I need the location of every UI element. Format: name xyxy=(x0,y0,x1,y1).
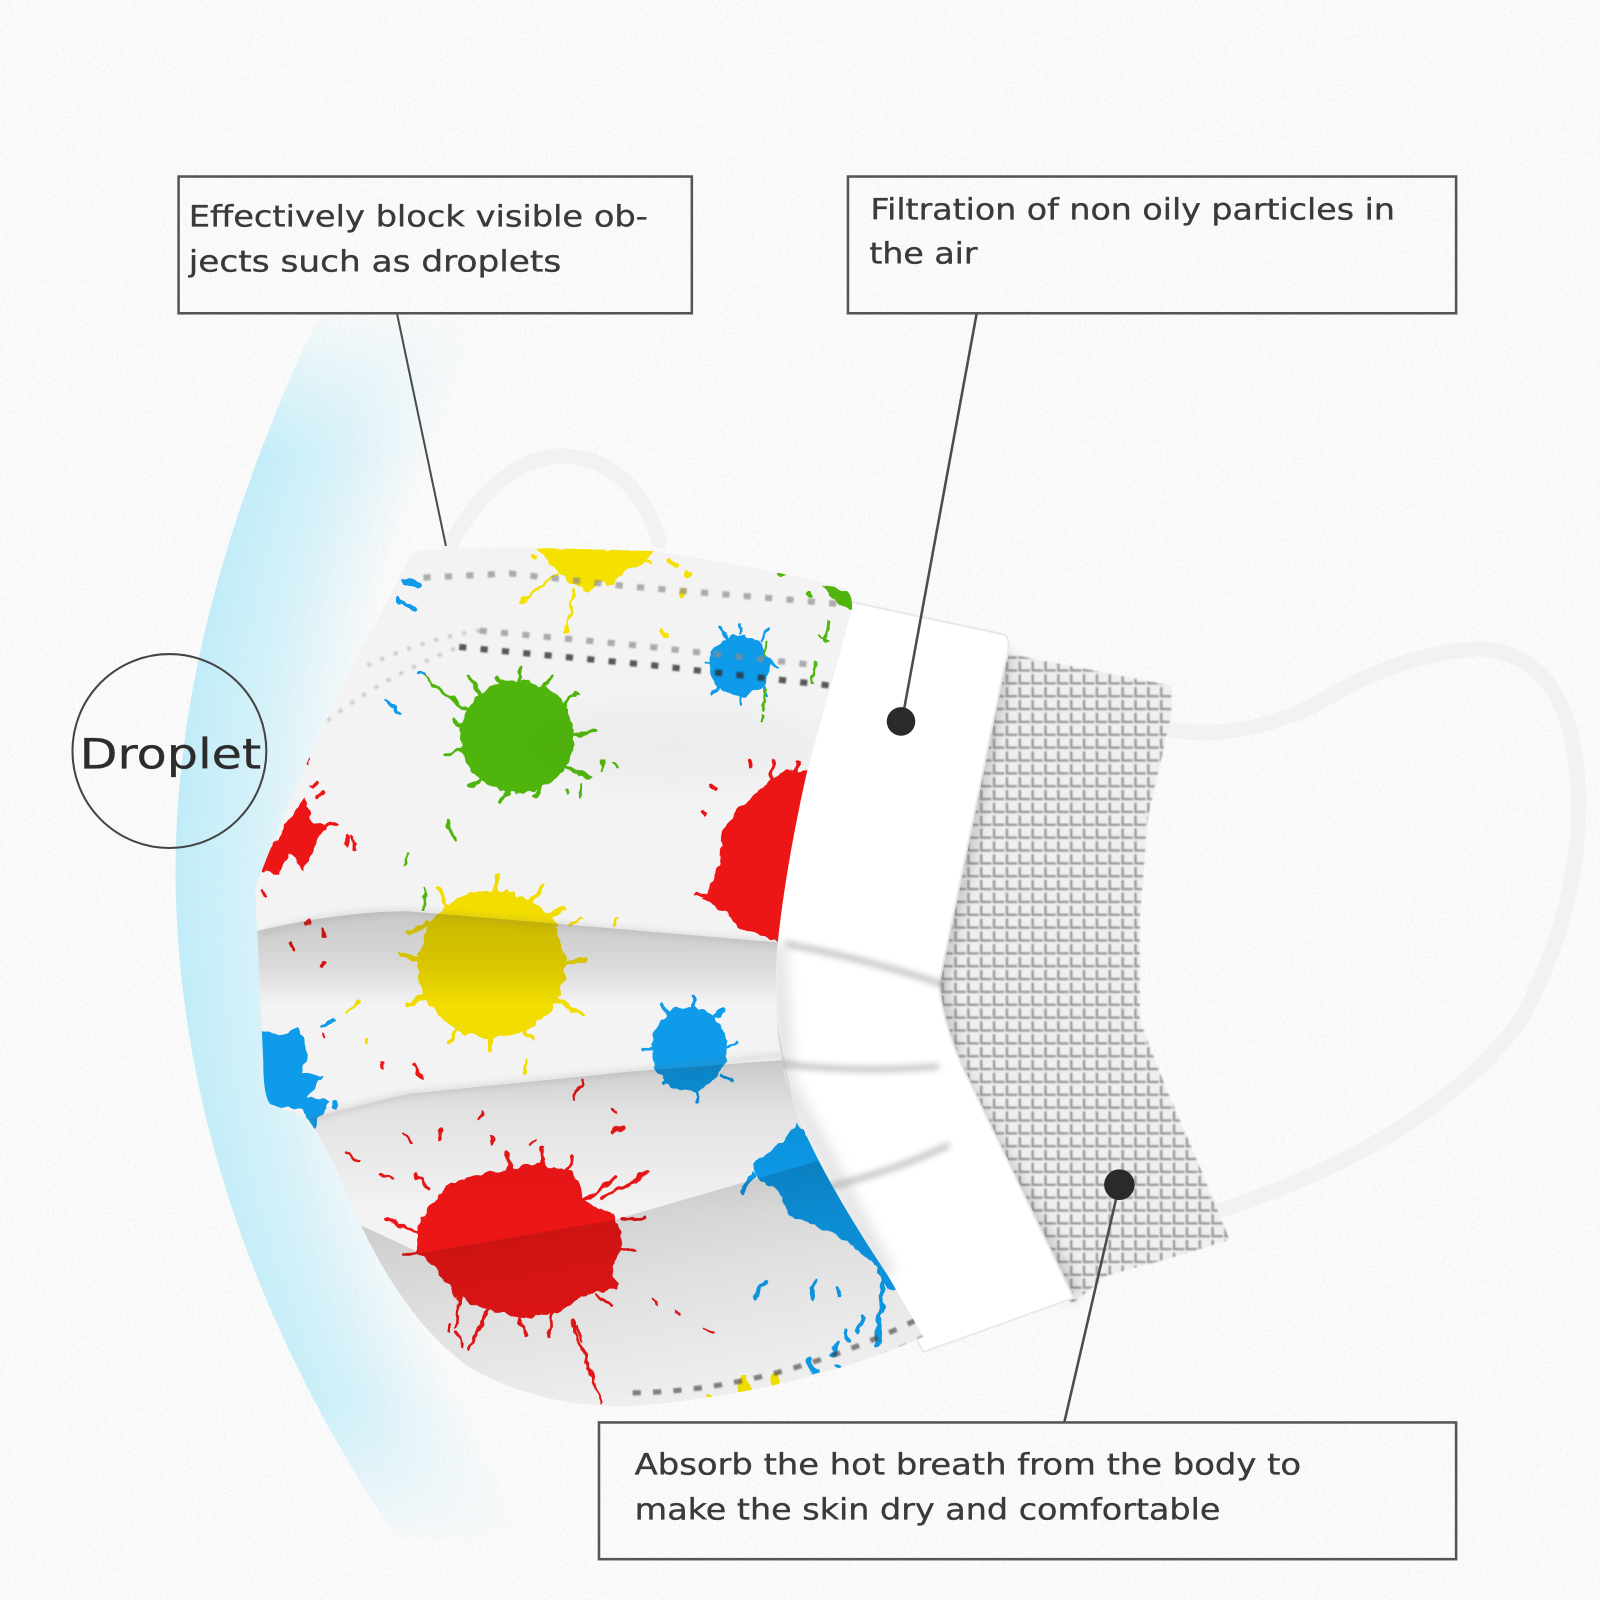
splat: top left blue xyxy=(386,582,424,713)
splat: green xyxy=(405,668,618,910)
splat: blue left xyxy=(262,1018,338,1129)
callout: filtration: the air xyxy=(869,236,978,270)
splat: top corner green xyxy=(777,572,852,610)
splat: yellow top xyxy=(520,548,689,635)
pleat shadows on band xyxy=(776,944,949,1189)
printed mask front xyxy=(245,541,969,1418)
leader line and dot: absorb callout xyxy=(1064,1169,1135,1422)
callout: block droplets xyxy=(179,177,692,313)
callout: filtration xyxy=(848,177,1456,313)
droplet shield arc xyxy=(176,326,465,1526)
callout: block droplets: Effectively block visible ob- xyxy=(189,200,648,234)
perforated stitching xyxy=(316,573,923,1406)
splat: yellow middle xyxy=(347,876,618,1071)
pleat shading xyxy=(257,908,912,1392)
splat: blue right xyxy=(741,1122,903,1373)
callout: absorb breath: make the skin dry and comfortable xyxy=(635,1492,1220,1526)
splat: yellow bottom xyxy=(706,1371,781,1398)
splat: blue middle xyxy=(643,998,737,1100)
callout: block droplets: jects such as droplets xyxy=(188,244,561,278)
splat: blue small xyxy=(704,622,778,704)
splat: red large xyxy=(324,1036,714,1403)
leader line: droplet callout xyxy=(397,313,446,546)
splat: red left xyxy=(257,760,354,968)
splat: red right xyxy=(693,758,808,942)
ear loop: right xyxy=(1173,649,1579,1212)
droplet label circle xyxy=(72,654,266,848)
leader line and dot: filtration callout xyxy=(887,314,977,736)
callout: absorb breath xyxy=(599,1422,1456,1559)
inner mesh layer xyxy=(937,653,1230,1304)
callout: absorb breath: Absorb the hot breath from the body to xyxy=(635,1447,1301,1481)
paint splatters xyxy=(255,548,903,1406)
ear loops xyxy=(449,456,1579,1212)
callout: filtration: Filtration of non oily particles in xyxy=(870,192,1395,226)
white side band xyxy=(755,602,1073,1352)
ear loop: left xyxy=(449,456,659,546)
droplet label circle: Droplet xyxy=(80,729,261,778)
